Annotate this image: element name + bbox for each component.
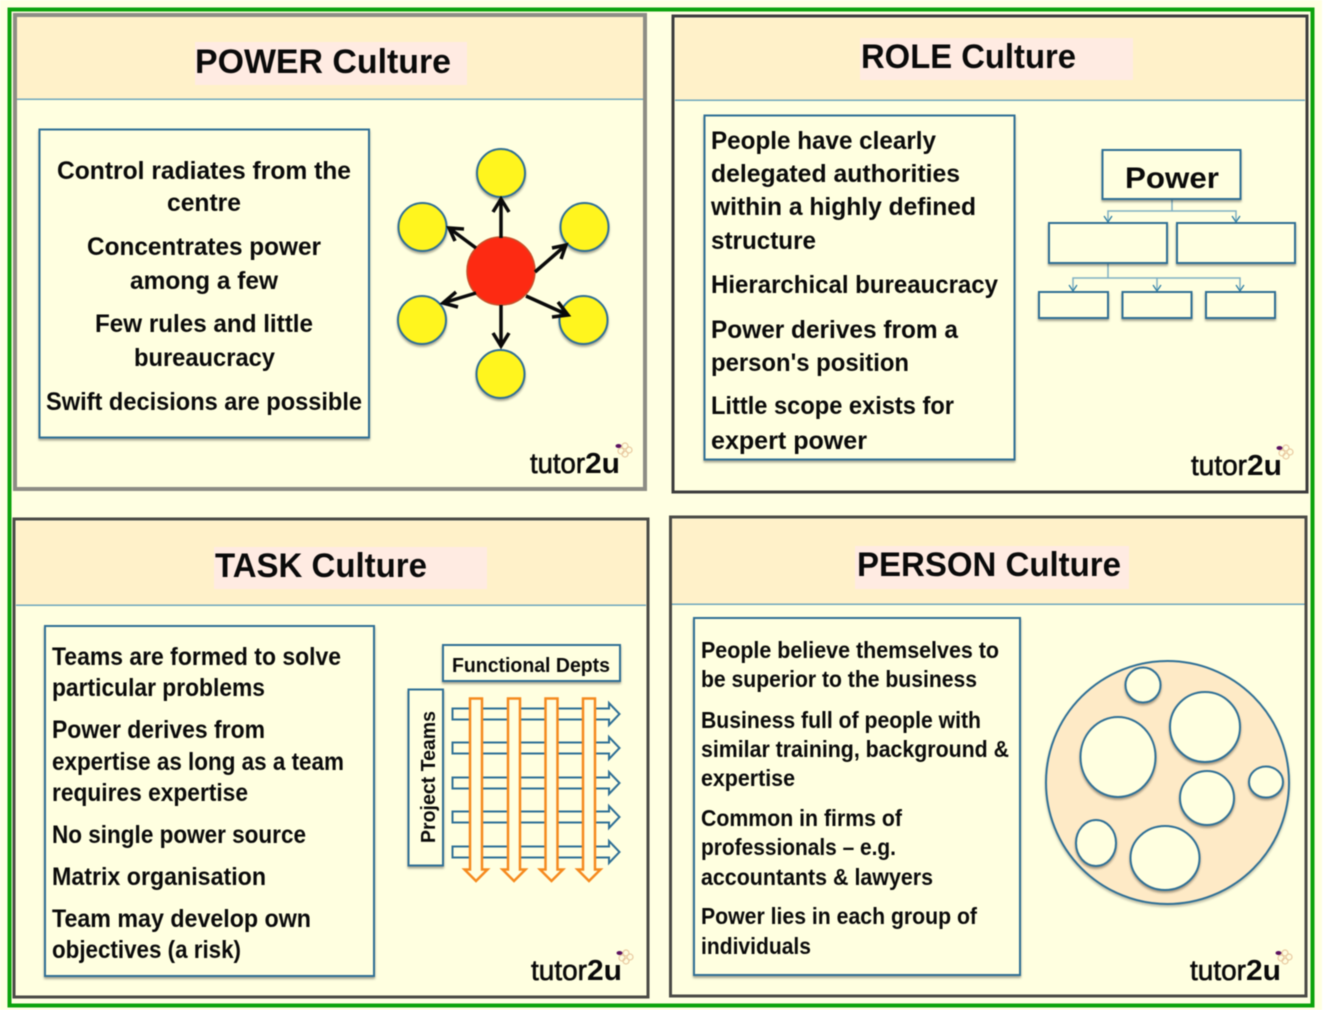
role text box: Power derives from a [711,316,959,344]
tutor2u logo [1191,445,1293,482]
task text box: Power derives from [52,716,265,744]
power header rule [17,98,643,100]
tutor2u logo [1190,950,1292,987]
tutor2u logo: 2u [1247,450,1282,482]
task text box [45,626,374,976]
panel: person culture [670,517,1306,996]
power text box: Concentrates power [87,233,321,261]
tutor2u logo [531,950,633,987]
role text box: delegated authorities [711,160,960,188]
power panel header band [17,17,643,99]
person text box: People believe themselves to [701,637,999,663]
person header rule [672,604,1304,605]
panel: task culture [14,519,648,997]
tutor2u logo: tutor [1190,955,1246,987]
task text box: expertise as long as a team [52,748,344,776]
tutor2u logo: tutor [530,448,585,480]
role text box: Little scope exists for [711,392,954,420]
person panel header band [672,519,1304,604]
task panel background [14,519,648,997]
task panel header band [16,521,646,605]
power text box [40,130,369,438]
role text box: Hierarchical bureaucracy [711,271,998,299]
person text box: Business full of people with [701,707,981,733]
task text box: objectives (a risk) [52,936,241,964]
person text box: Power lies in each group of [701,903,977,929]
power text box: Few rules and little [95,310,313,338]
person text box: individuals [701,933,811,959]
role text box: structure [711,227,816,255]
tutor2u logo: tutor [1191,450,1247,482]
task title: TASK Culture [215,547,427,585]
role text box: People have clearly [711,127,936,155]
power title: POWER Culture [195,43,451,81]
person text box: be superior to the business [701,666,977,692]
task header rule [16,604,646,606]
tutor2u logo: 2u [1246,955,1281,987]
tutor2u logo: 2u [587,955,622,987]
role panel header band [675,18,1305,100]
role title: ROLE Culture [861,38,1076,76]
power text box: bureaucracy [134,344,275,372]
task text box: requires expertise [52,779,248,807]
panel: role culture [673,16,1307,492]
power text box: centre [167,189,241,217]
person panel background [670,517,1306,996]
power text box: Control radiates from the [57,157,351,185]
task text box: Team may develop own [52,905,311,933]
role text box [704,116,1014,460]
power text box: among a few [130,267,279,295]
tutor2u logo: 2u [585,448,620,480]
power text box: Swift decisions are possible [46,388,362,416]
role panel background [673,16,1307,492]
role text box: expert power [711,427,867,455]
tutor2u logo: tutor [531,955,587,987]
power panel background [15,15,645,489]
person text box: similar training, background & [701,736,1009,762]
person text box: professionals – e.g. [701,834,896,860]
circles diagram [1046,661,1289,904]
role text box: person's position [711,349,909,377]
person title: PERSON Culture [857,546,1121,584]
person text box: accountants & lawyers [701,864,933,890]
role text box: within a highly defined [710,193,976,221]
matrix diagram: Functional Depts [452,655,610,677]
task text box: particular problems [52,674,265,702]
matrix diagram: Project Teams [418,711,440,843]
hierarchy org chart [1039,150,1295,318]
matrix diagram [408,645,620,881]
panel: power culture [15,15,645,489]
task text box: Matrix organisation [52,863,266,891]
task text box: Teams are formed to solve [52,643,341,671]
hierarchy org chart: Power [1125,162,1219,195]
role header rule [675,100,1305,101]
radial power diagram [398,149,608,398]
tutor2u logo [530,443,632,480]
person text box: expertise [701,765,795,791]
person text box [694,618,1020,975]
task text box: No single power source [52,821,306,849]
person text box: Common in firms of [701,805,902,831]
